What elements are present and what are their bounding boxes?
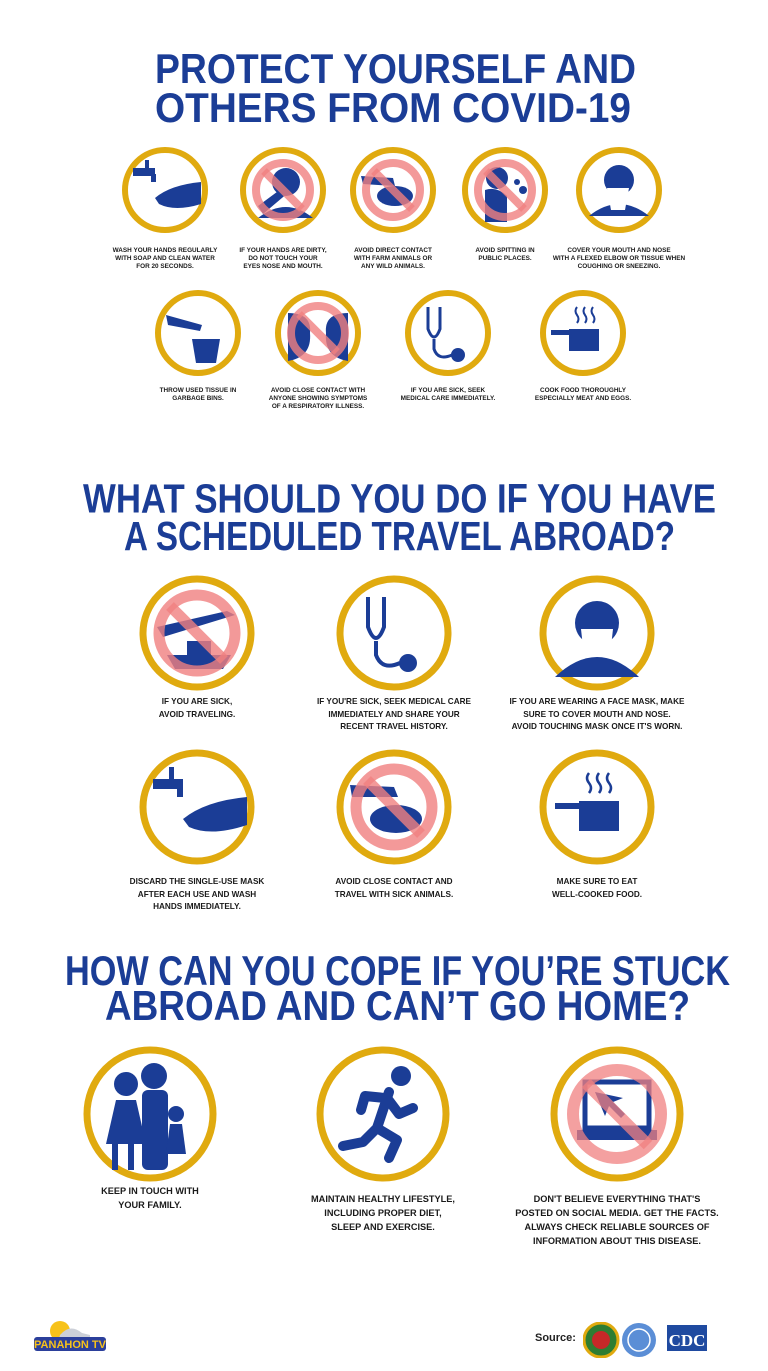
caption: face mask: IF YOU ARE WEARING A FACE MASK, MAKE: [510, 697, 684, 706]
icon: sick animals: [340, 753, 448, 861]
icon: no social media: [554, 1050, 680, 1178]
icon: animals: [353, 150, 433, 230]
heading: travel abroad: [83, 476, 716, 558]
logo: Panahon TV: PANAHON TV: [34, 1339, 107, 1351]
icon row 5: [84, 1046, 684, 1182]
caption: social media: DON'T BELIEVE EVERYTHING THAT'S: [534, 1194, 700, 1204]
caption: social media: POSTED ON SOCIAL MEDIA. GET THE FACTS.: [515, 1208, 719, 1218]
caption: sick animals: AVOID CLOSE CONTACT AND: [335, 877, 453, 886]
caption: spitting: [475, 247, 535, 262]
caption: cook food: ESPECIALLY MEAT AND EGGS.: [535, 395, 631, 402]
caption: cook food: [535, 387, 631, 402]
caption: social media: INFORMATION ABOUT THIS DISEASE.: [533, 1236, 701, 1246]
title: PROTECT YOURSELF AND: [155, 47, 636, 93]
caption: face mask: SURE TO COVER MOUTH AND NOSE.: [523, 710, 671, 718]
caption: discard mask: AFTER EACH USE AND WASH: [138, 890, 256, 898]
source logos: Source:: [535, 1332, 576, 1344]
icon: tissue bin: [158, 293, 238, 373]
caption: share travel history: IMMEDIATELY AND SHARE YOUR: [328, 710, 460, 718]
caption: healthy lifestyle: INCLUDING PROPER DIET,: [324, 1208, 442, 1218]
icon: stethoscope: [408, 293, 488, 373]
icon: wash hands: [143, 753, 251, 861]
caption: close contact: AVOID CLOSE CONTACT WITH: [271, 387, 365, 394]
caption: avoid traveling: [159, 697, 235, 718]
caption: sick animals: [334, 877, 453, 898]
caption: animals: ANY WILD ANIMALS.: [361, 263, 425, 270]
caption: cover mouth: COUGHING OR SNEEZING.: [578, 263, 660, 270]
caption: face mask: [510, 697, 684, 731]
caption: close contact: [269, 387, 367, 410]
icon: no spitting: [465, 150, 545, 230]
caption: avoid traveling: IF YOU ARE SICK,: [162, 697, 232, 706]
icon rows 3-4: [140, 576, 654, 864]
caption: seek care: MEDICAL CARE IMMEDIATELY.: [401, 395, 495, 402]
caption: dirty hands: [239, 247, 327, 270]
caption: discard mask: DISCARD THE SINGLE-USE MASK: [130, 877, 264, 886]
caption: dirty hands: EYES NOSE AND MOUTH.: [243, 263, 323, 270]
logo: Panahon TV: [34, 1321, 107, 1351]
caption: tissue: THROW USED TISSUE IN: [160, 387, 236, 394]
icon: cooking pot: [543, 753, 651, 861]
caption: spitting: PUBLIC PLACES.: [478, 255, 532, 262]
source logos: [535, 1322, 707, 1358]
heading: travel abroad: WHAT SHOULD YOU DO IF YOU HAVE: [83, 476, 716, 521]
caption: share travel history: [317, 697, 471, 731]
caption: discard mask: [130, 877, 264, 911]
caption: seek care: [401, 387, 495, 402]
caption: social media: [515, 1194, 719, 1246]
icon: cooking pot: [543, 293, 623, 373]
icon: stethoscope: [340, 579, 448, 687]
icon: family: [87, 1050, 213, 1178]
logo: CDC: CDC: [669, 1331, 705, 1350]
logo: DOH: [584, 1323, 618, 1357]
icon: runner: [320, 1050, 446, 1178]
caption: face mask: AVOID TOUCHING MASK ONCE IT'S WORN.: [512, 722, 682, 731]
caption: animals: AVOID DIRECT CONTACT: [354, 247, 432, 254]
caption: discard mask: HANDS IMMEDIATELY.: [153, 902, 241, 911]
caption: well-cooked: MAKE SURE TO EAT: [557, 877, 637, 886]
icon row 1: [122, 147, 662, 376]
icon: wash hands: [125, 150, 205, 230]
caption: spitting: AVOID SPITTING IN: [475, 247, 535, 254]
caption: healthy lifestyle: MAINTAIN HEALTHY LIFESTYLE,: [311, 1194, 455, 1204]
caption: family: YOUR FAMILY.: [118, 1200, 182, 1210]
caption: sick animals: TRAVEL WITH SICK ANIMALS.: [335, 890, 453, 898]
caption: cook food: COOK FOOD THOROUGHLY: [540, 387, 626, 394]
caption: cover mouth: WITH A FLEXED ELBOW OR TISSUE WHEN: [553, 255, 685, 262]
title: OTHERS FROM COVID-19: [155, 86, 631, 132]
heading: stuck abroad: [65, 949, 731, 1030]
icon: avoid close contact: [278, 293, 358, 373]
caption: share travel history: RECENT TRAVEL HISTORY.: [340, 722, 448, 731]
caption: healthy lifestyle: SLEEP AND EXERCISE.: [331, 1222, 435, 1232]
heading: stuck abroad: ABROAD AND CAN’T GO HOME?: [105, 984, 690, 1030]
icon: do not touch face: [243, 150, 323, 230]
caption: family: KEEP IN TOUCH WITH: [101, 1186, 199, 1196]
logo: WHO: [622, 1323, 656, 1357]
caption: close contact: ANYONE SHOWING SYMPTOMS: [269, 395, 367, 402]
caption: cover mouth: [552, 247, 685, 270]
caption: close contact: OF A RESPIRATORY ILLNESS.: [272, 403, 364, 410]
caption: wash hands: WITH SOAP AND CLEAN WATER: [115, 255, 215, 262]
caption: family: [101, 1186, 199, 1210]
title: [155, 47, 636, 132]
caption: seek care: IF YOU ARE SICK, SEEK: [411, 387, 485, 394]
caption: well-cooked: WELL-COOKED FOOD.: [552, 890, 642, 898]
caption: animals: [354, 247, 432, 270]
caption: wash hands: FOR 20 SECONDS.: [136, 263, 194, 270]
caption: share travel history: IF YOU'RE SICK, SEEK MEDICAL CARE: [317, 697, 471, 706]
caption: animals: WITH FARM ANIMALS OR: [354, 255, 432, 262]
icon: face mask: [543, 579, 651, 687]
caption: wash hands: WASH YOUR HANDS REGULARLY: [113, 247, 217, 254]
caption: social media: ALWAYS CHECK RELIABLE SOURCES OF: [525, 1222, 709, 1232]
caption: cover mouth: COVER YOUR MOUTH AND NOSE: [567, 247, 671, 254]
caption: dirty hands: DO NOT TOUCH YOUR: [248, 255, 318, 262]
heading: travel abroad: A SCHEDULED TRAVEL ABROAD?: [124, 513, 675, 558]
caption: tissue: GARBAGE BINS.: [172, 395, 224, 402]
caption: healthy lifestyle: [311, 1194, 455, 1232]
caption: wash hands: [112, 247, 218, 270]
caption: avoid traveling: AVOID TRAVELING.: [159, 710, 235, 718]
caption: tissue: [160, 387, 236, 402]
heading: stuck abroad: HOW CAN YOU COPE IF YOU’RE STUCK: [65, 949, 731, 995]
icon: no travel: [143, 579, 251, 687]
caption: dirty hands: IF YOUR HANDS ARE DIRTY,: [239, 247, 327, 254]
icon: cover cough: [579, 150, 659, 230]
caption: well-cooked: [552, 877, 642, 898]
